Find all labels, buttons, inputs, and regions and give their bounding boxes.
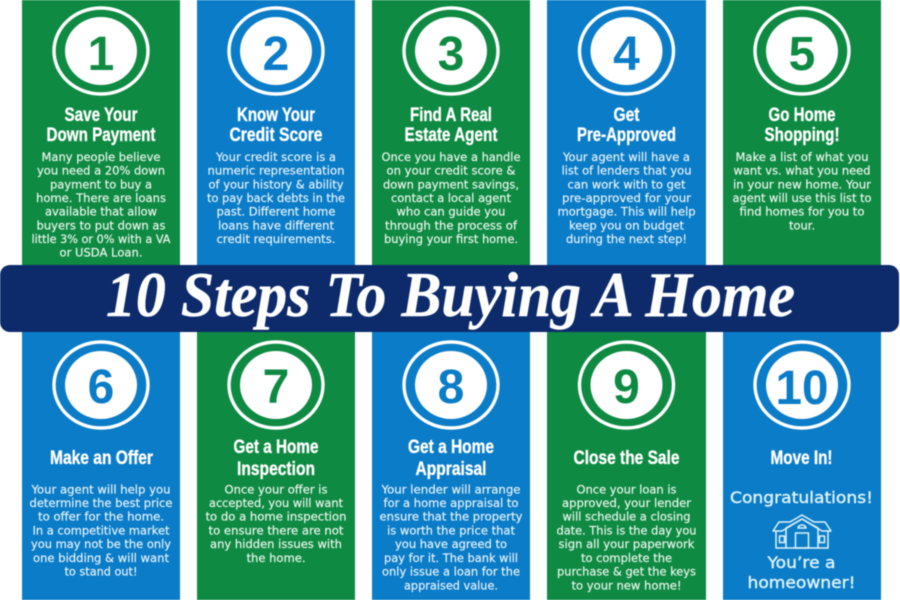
text block: step 1	[32, 150, 171, 260]
icon: number 9 badge: 9	[613, 361, 640, 414]
text block: step 9: approved, your lender	[562, 496, 691, 510]
icon: number 10 badge: 10	[776, 362, 828, 415]
heading: step 5	[764, 104, 840, 146]
text block: step 3: who can guide you	[396, 205, 506, 219]
text block: step 7: any hidden issues with	[210, 537, 342, 551]
heading: step 8: Get a Home	[408, 436, 494, 458]
heading: step 7: Get a Home	[234, 436, 319, 458]
heading: step 3	[404, 104, 498, 146]
icon: number 2 badge	[229, 8, 323, 94]
text block: step 8: ensure that the property	[380, 510, 523, 524]
text block: step 6: you may not be the only	[31, 537, 171, 551]
text block: step 1: you need a 20% down	[37, 164, 165, 178]
text block: step 9	[556, 482, 696, 592]
text block: step 1: Many people believe	[42, 150, 160, 164]
text: congratulations: Congratulations!	[730, 488, 873, 507]
text block: step 2: past. Different home	[216, 205, 336, 219]
text block: step 9: sign all your paperwork	[558, 537, 695, 551]
heading: step 3: Estate Agent	[404, 124, 498, 146]
heading: step 3: Find A Real	[410, 104, 492, 126]
text block: step 1: payment to buy a	[50, 177, 152, 191]
text block: step 7: to do a home inspection	[206, 510, 346, 524]
text block: step 8: only issue a loan for the	[382, 565, 520, 579]
icon: number 7 badge	[229, 342, 323, 428]
icon: number 1 badge: 1	[88, 28, 114, 81]
heading: step 8: Appraisal	[416, 458, 486, 480]
text block: step 6: one bidding & will want	[33, 551, 169, 565]
text block: step 3	[382, 150, 520, 246]
text block: step 4: keep you on budget	[569, 218, 684, 232]
heading: step 2	[230, 104, 323, 146]
panel: step 9	[547, 328, 706, 600]
icon: number 9 badge	[580, 342, 674, 428]
icon: number 3 badge: 3	[438, 28, 464, 81]
text block: step 2: of your history & ability	[208, 177, 344, 191]
panel: step 1	[22, 0, 180, 270]
text block: step 9: to complete the	[581, 551, 672, 565]
text block: step 8: for a home appraisal to	[384, 496, 518, 510]
text block: step 6: to stand out!	[64, 565, 138, 579]
heading: step 6: Make an Offer	[50, 447, 153, 469]
text block: step 4: pre-approved for your	[562, 191, 691, 205]
text block: step 2: to pay back debts in the	[207, 191, 345, 205]
heading: step 8	[408, 436, 494, 480]
panel: step 2	[197, 0, 355, 270]
text block: step 9: date. This is the day you	[556, 523, 696, 537]
text block: step 7: to ensure there are not	[208, 523, 344, 537]
heading: step 5: Shopping!	[764, 124, 840, 146]
icon: number 10 badge	[755, 342, 849, 428]
icon: number 8 badge	[404, 342, 498, 428]
icon: number 3 badge	[404, 8, 498, 94]
text block: step 2: credit requirements.	[216, 232, 336, 246]
icon: number 4 badge: 4	[613, 28, 640, 81]
icon: number 2 badge: 2	[263, 28, 289, 81]
text block: step 4: list of lenders that you	[562, 164, 692, 178]
icon: number 7 badge: 7	[263, 361, 289, 414]
text block: step 4	[558, 150, 696, 246]
text block: step 2: Your credit score is a	[215, 150, 336, 164]
text: you're a homeowner	[748, 553, 856, 592]
text block: step 8: is worth the price that	[387, 523, 515, 537]
heading: step 4	[577, 104, 676, 146]
heading: step 10: Move In!	[770, 447, 832, 469]
icon: number 5 badge: 5	[789, 28, 815, 81]
panel: step 6	[22, 328, 180, 600]
icon: number 1 badge	[54, 8, 148, 94]
text block: step 5: in your new home. Your	[733, 177, 871, 191]
title banner	[0, 259, 899, 332]
text block: step 1: or USDA Loan.	[60, 246, 142, 260]
text block: step 5	[732, 150, 872, 232]
text block: step 7: the home.	[246, 551, 306, 565]
heading: step 4: Pre-Approved	[577, 124, 676, 146]
panel: step 7	[197, 328, 355, 600]
text block: step 5: Make a list of what you	[736, 150, 868, 164]
text block: step 9: to your new home!	[572, 578, 682, 592]
text block: step 2: loans have different	[218, 218, 334, 232]
text block: step 2	[207, 150, 345, 246]
text block: step 3: down payment savings,	[383, 177, 519, 191]
text block: step 8: pay for it. The bank will	[384, 551, 518, 565]
panel: step 4	[547, 0, 706, 270]
icon: number 4 badge	[580, 8, 674, 94]
text block: step 3: contact a local agent	[391, 191, 511, 205]
text block: step 2: numeric representation	[208, 164, 344, 178]
text block: step 1: little 3% or 0% with a VA	[32, 232, 171, 246]
text block: step 6: to offer for the home.	[38, 510, 164, 524]
text block: step 6	[30, 482, 172, 579]
heading: step 2: Credit Score	[230, 124, 323, 146]
heading: step 4: Get	[614, 104, 640, 126]
heading: step 1: Down Payment	[46, 124, 156, 146]
title: 10 Steps To Buying A Home	[106, 259, 795, 330]
text block: step 3: buying your first home.	[384, 232, 518, 246]
heading: step 7: Inspection	[237, 458, 315, 480]
text block: step 7	[206, 482, 346, 565]
heading: step 1: Save Your	[64, 104, 138, 126]
text block: step 9: purchase & get the keys	[557, 565, 696, 579]
heading: step 7	[234, 436, 319, 480]
heading: step 9: Close the Sale	[574, 447, 680, 469]
text block: step 1: available that allow	[45, 205, 157, 219]
icon: number 6 badge: 6	[88, 361, 114, 414]
panel: step 3	[372, 0, 530, 270]
text block: step 8: you have agreed to	[395, 537, 507, 551]
text block: step 1: home. There are loans	[36, 191, 166, 205]
text block: step 1: buyers to put down as	[36, 218, 166, 232]
text block: step 4: Your agent will have a	[562, 150, 690, 164]
text block: step 6: determine the best price	[30, 496, 172, 510]
text block: step 6: Your agent will help you	[30, 482, 170, 496]
heading: step 2: Know Your	[237, 104, 315, 126]
panel: step 5	[723, 0, 881, 270]
text block: step 4: mortgage. This will help	[558, 205, 696, 219]
icon: number 5 badge	[755, 8, 849, 94]
text block: step 5: want vs. what you need	[734, 164, 870, 178]
panel: step 10	[723, 328, 881, 600]
text block: step 8: Your lender will arrange	[380, 482, 520, 496]
text: you're a homeowner: You’re a	[766, 553, 836, 572]
text block: step 5: find homes for you to	[740, 205, 864, 219]
panel: step 8	[372, 328, 530, 600]
text block: step 9: Once your loan is	[576, 482, 676, 496]
text: you're a homeowner: homeowner!	[748, 573, 856, 592]
text block: step 7: Once your offer is	[224, 482, 328, 496]
text block: step 4: can work with to get	[568, 177, 686, 191]
text block: step 3: on your credit score &	[386, 164, 516, 178]
text block: step 4: during the next step!	[566, 232, 687, 246]
text block: step 6: In a competitive market	[32, 523, 170, 537]
heading: step 5: Go Home	[768, 104, 836, 126]
text block: step 5: tour.	[789, 218, 815, 232]
text block: step 3: Once you have a handle	[382, 150, 520, 164]
icon: number 6 badge	[54, 342, 148, 428]
text block: step 9: will schedule a closing	[562, 510, 690, 524]
text block: step 8: appraised value.	[404, 578, 498, 592]
text block: step 8	[380, 482, 523, 592]
icon: number 8 badge: 8	[438, 361, 464, 414]
heading: step 1	[46, 104, 156, 146]
text block: step 5: agent will use this list to	[732, 191, 872, 205]
icon: house	[773, 515, 831, 548]
text block: step 7: accepted, you will want	[209, 496, 343, 510]
text block: step 3: through the process of	[385, 218, 518, 232]
